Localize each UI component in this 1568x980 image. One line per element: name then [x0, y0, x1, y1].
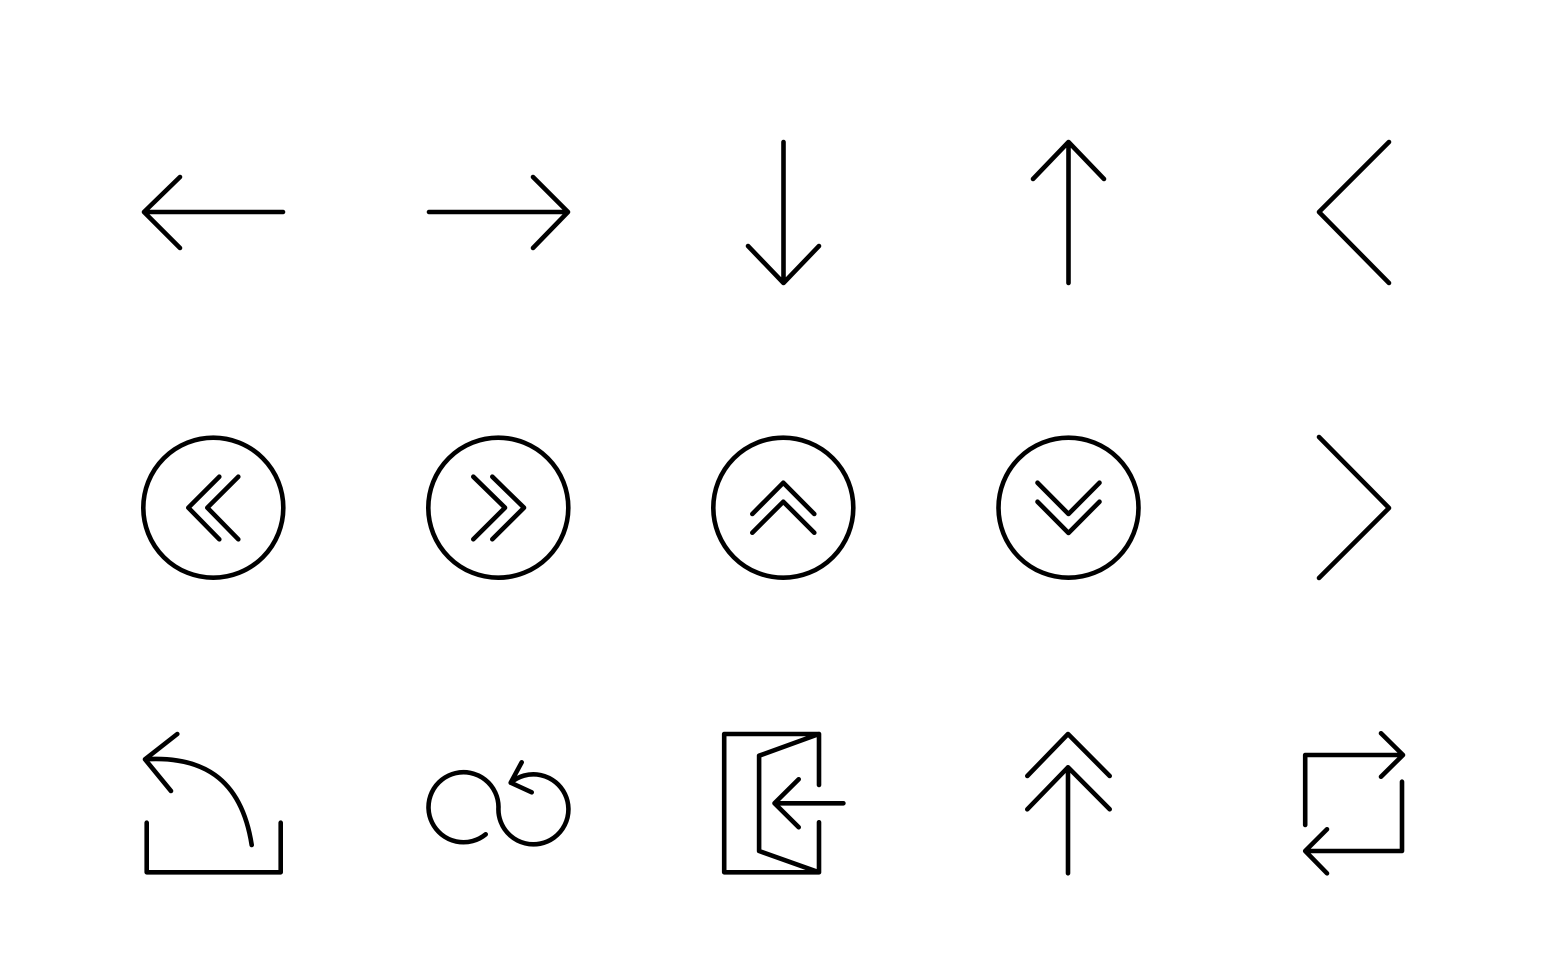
icon: arrow up — [1033, 142, 1104, 283]
icon: circled double chevron up — [713, 438, 853, 578]
icon: arrow down — [748, 142, 819, 283]
icon: chevron left — [1319, 142, 1389, 283]
icon: double arrow up — [1027, 734, 1110, 873]
icon: circled double chevron right — [428, 438, 568, 578]
icon: circled double chevron down — [998, 438, 1138, 578]
icon: infinity loop with arrow — [429, 762, 568, 844]
icon: door enter — [724, 734, 843, 872]
icon: repeat arrows — [1305, 733, 1403, 873]
icon: chevron right — [1319, 437, 1389, 578]
icon: share out of tray — [145, 734, 281, 872]
icon: circled double chevron left — [143, 438, 283, 578]
icon: arrow left — [144, 177, 283, 248]
icon: arrow right — [429, 177, 568, 248]
